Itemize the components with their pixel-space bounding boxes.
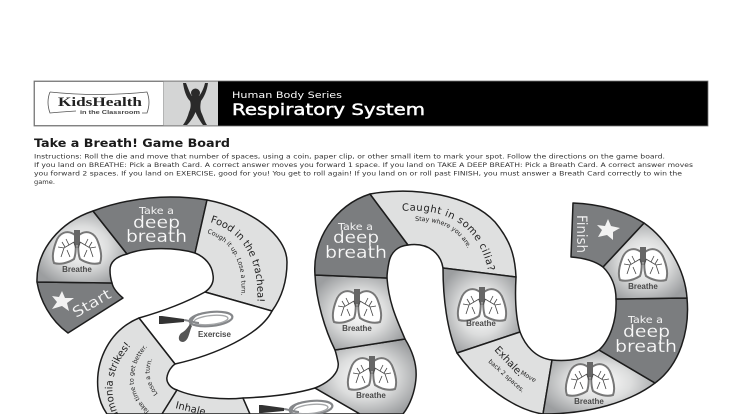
space: breathe 4 xyxy=(443,268,520,353)
space: pneumonia strikes: Take time to get better. xyxy=(130,346,149,414)
space: take a deep breath 1: deep xyxy=(133,213,180,233)
space: exhale xyxy=(457,332,552,414)
space: take a deep breath 3 xyxy=(599,298,688,383)
space: exercise 1: Exercise xyxy=(198,330,232,339)
instructions xyxy=(34,154,693,186)
space: inhale xyxy=(162,390,250,414)
space: caught in some cilia xyxy=(370,190,517,278)
space: caught in some cilia: Stay where you are. xyxy=(416,216,470,248)
game board xyxy=(36,190,688,414)
space: breathe 6 xyxy=(603,223,687,299)
space: finish: Finish xyxy=(573,215,589,253)
series title: Respiratory System xyxy=(232,100,425,119)
space: exhale: back 2 spaces. xyxy=(487,358,526,394)
space: breathe 3 xyxy=(315,339,416,414)
space: food in the trachea: Food in the trachea! xyxy=(211,215,265,301)
space: food in the trachea: Cough it up. Lose a turn. xyxy=(208,229,246,295)
space: take a deep breath 2: deep xyxy=(333,228,379,248)
space: food in the trachea xyxy=(194,199,288,312)
space: take a deep breath 1: breath xyxy=(126,227,187,247)
space: start xyxy=(37,282,123,333)
space: exhale: Exhale. xyxy=(492,345,525,379)
space: take a deep breath 1: Take a xyxy=(138,206,174,217)
space: breathe 3: Breathe xyxy=(356,391,386,400)
space: breathe 5: Breathe xyxy=(574,397,604,406)
space: take a deep breath 3: Take a xyxy=(627,315,663,326)
space: exercise 2 xyxy=(243,388,360,414)
space: breathe 1: Breathe xyxy=(62,265,92,274)
space: breathe 5 xyxy=(543,350,655,414)
space: pneumonia strikes: Lose a turn. xyxy=(145,360,158,396)
space: start: Start xyxy=(70,286,115,321)
space: pneumonia strikes xyxy=(96,317,178,414)
instructions: If you land on BREATHE: Pick a Breath Card. A correct answer moves you forward 1 space. If you land on TAKE A DEEP BREATH: Pick a Breath Card. A correct answer moves xyxy=(34,162,693,169)
space: breathe 1 xyxy=(37,211,127,283)
space: breathe 2 xyxy=(315,275,405,350)
space: breathe 2: Breathe xyxy=(342,324,372,333)
logo panel xyxy=(34,82,164,126)
space: caught in some cilia: Caught in some cilia? xyxy=(402,203,495,270)
heading: Take a Breath! Game Board xyxy=(34,136,230,150)
figure panel xyxy=(164,82,218,126)
instructions: game. xyxy=(34,179,55,186)
space: exhale: Move xyxy=(519,370,537,384)
instructions: you forward 2 spaces. If you land on EXERCISE, good for you! You get to roll again! If you land on or roll past FINISH, you must answer a Breath Card correctly to win the xyxy=(34,170,682,178)
space: take a deep breath 1 xyxy=(93,197,207,254)
series label: Human Body Series xyxy=(232,91,343,101)
space: finish xyxy=(571,203,644,267)
header band xyxy=(34,81,708,126)
space: take a deep breath 3: breath xyxy=(615,337,677,357)
space: breathe 4: Breathe xyxy=(466,319,496,328)
space: take a deep breath 2: breath xyxy=(325,243,387,263)
logo panel: in the Classroom xyxy=(80,110,140,116)
logo panel: KidsHealth xyxy=(58,94,143,109)
instructions: Instructions: Roll the die and move that number of spaces, using a coin, paper clip, or other small item to mark your spot. Follow the directions on the game board. xyxy=(34,154,665,160)
space: take a deep breath 3: deep xyxy=(623,322,670,342)
space: take a deep breath 2: Take a xyxy=(337,222,373,233)
space: exercise 1 xyxy=(139,292,272,364)
space: take a deep breath 2 xyxy=(315,194,408,278)
space: breathe 6: Breathe xyxy=(628,282,658,291)
